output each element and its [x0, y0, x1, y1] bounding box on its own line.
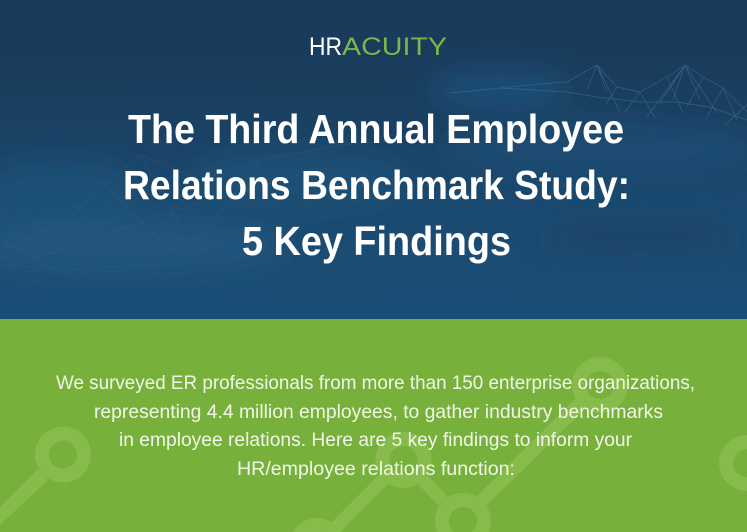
intro text: representing 4.4 million employees, to gather industry benchmarks [94, 401, 663, 423]
intro text: We surveyed ER professionals from more than 150 enterprise organizations, [56, 372, 695, 394]
title: Relations Benchmark Study: [123, 162, 630, 208]
logo: HR Acuity: ACUITY [342, 33, 447, 61]
network mesh: left [0, 140, 400, 272]
network pattern [0, 357, 747, 532]
network mesh: right [450, 65, 747, 125]
title [123, 106, 630, 264]
intro text: in employee relations. Here are 5 key findings to inform your [119, 429, 632, 451]
panel: green intro section [0, 319, 747, 532]
title: The Third Annual Employee [128, 106, 624, 152]
logo: HR Acuity [309, 33, 447, 61]
logo: HR Acuity: HR [309, 33, 342, 61]
panel: navy header banner [0, 0, 747, 319]
intro text: HR/employee relations function: [237, 458, 515, 480]
title: 5 Key Findings [242, 218, 511, 264]
intro text [56, 372, 695, 480]
